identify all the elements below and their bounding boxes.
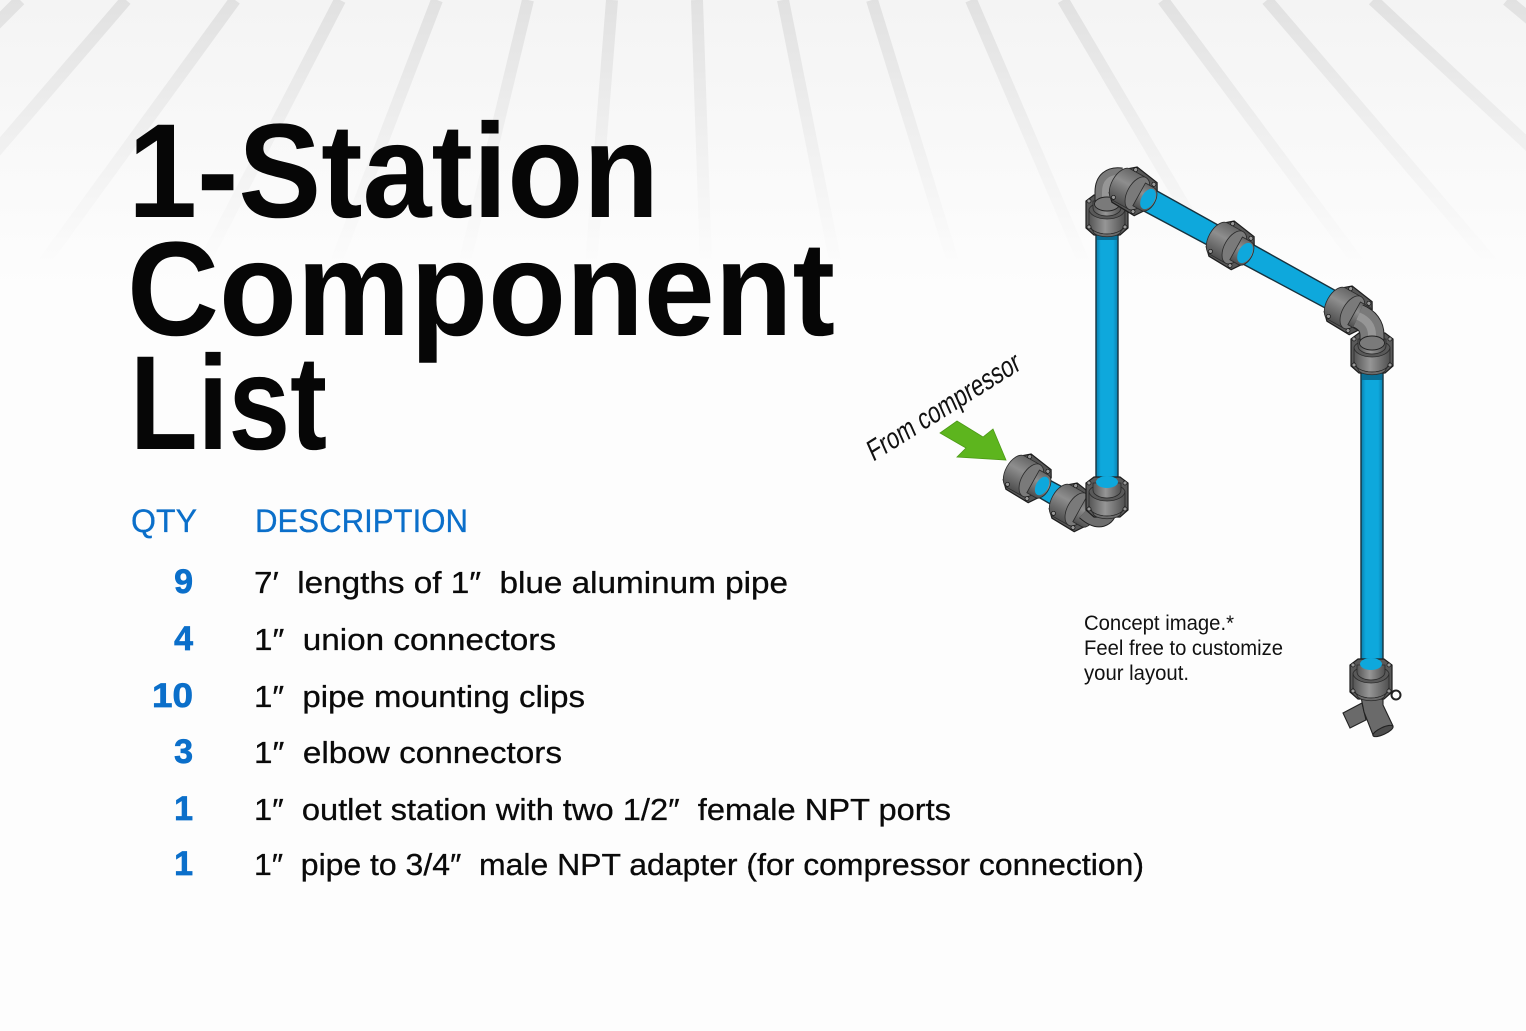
pipe shadows below clamps <box>1097 230 1382 380</box>
description column: 1″ pipe to 3/4″ male NPT adapter (for compressor connection) <box>254 847 1144 882</box>
description column: 1″ union connectors <box>254 622 556 657</box>
elbow bottom left <box>1088 503 1105 514</box>
quantity column: 10 <box>152 677 193 715</box>
quantity column: 3 <box>174 733 193 771</box>
description column: 1″ elbow connectors <box>254 735 562 770</box>
pipe system diagram <box>997 160 1400 739</box>
description column: 1″ outlet station with two 1/2″ female NPT ports <box>254 792 951 827</box>
lower-left far clamp <box>997 447 1060 508</box>
pipes <box>1033 191 1383 665</box>
elbow top left <box>1094 179 1121 211</box>
background rays <box>0 0 1526 265</box>
quantity column: 9 <box>174 563 193 601</box>
description column <box>254 565 1144 882</box>
quantity column <box>152 563 193 883</box>
title: List <box>130 329 327 478</box>
table header: QTY <box>131 503 197 539</box>
quantity column: 1 <box>174 790 193 828</box>
lower-left near clamp <box>1043 476 1106 537</box>
concept note <box>1084 612 1283 685</box>
quantity column: 4 <box>174 620 193 658</box>
table header <box>131 503 468 539</box>
right vertical clamp <box>1351 333 1393 375</box>
title: 1-Station <box>128 97 659 246</box>
lower-left vertical clamp <box>1086 477 1128 519</box>
outlet station <box>1343 690 1400 739</box>
title <box>127 97 835 478</box>
mid union clamp <box>1200 214 1263 275</box>
elbow top right <box>1358 316 1384 350</box>
title: Component <box>127 215 835 364</box>
right diagonal clamp <box>1318 279 1381 340</box>
table header: DESCRIPTION <box>255 503 468 539</box>
description column: 7′ lengths of 1″ blue aluminum pipe <box>254 565 788 600</box>
concept note: your layout. <box>1084 662 1189 685</box>
arrow: airflow direction <box>940 421 1006 460</box>
concept note: Concept image.* <box>1084 612 1234 635</box>
from compressor label: From compressor <box>863 346 1025 468</box>
outlet clamp <box>1350 659 1392 701</box>
description column: 1″ pipe mounting clips <box>254 679 585 714</box>
top-left diagonal clamp <box>1103 160 1166 221</box>
quantity column: 1 <box>174 845 193 883</box>
top-left vertical clamp <box>1086 195 1128 237</box>
concept note: Feel free to customize <box>1084 637 1283 660</box>
